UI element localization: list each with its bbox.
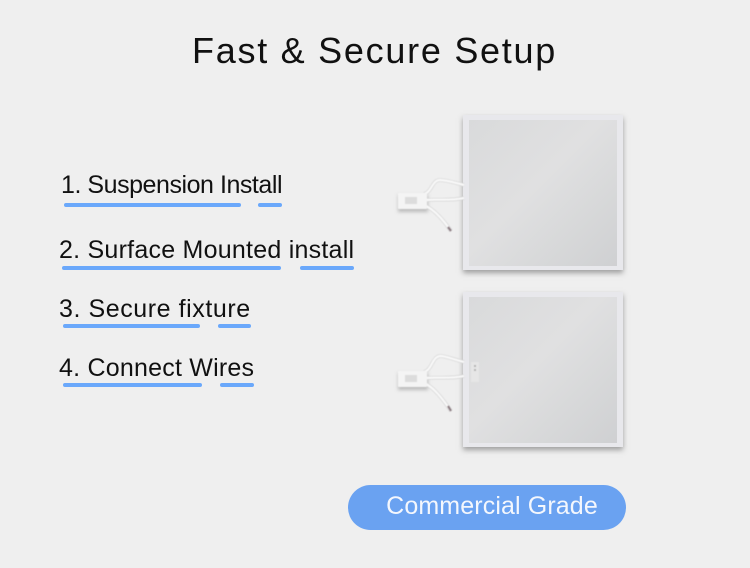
step 3 (59, 295, 251, 328)
button: Commercial Grade (348, 485, 626, 530)
step 3 underline (63, 324, 251, 328)
step 1 (61, 171, 282, 207)
step 1 underline (64, 203, 282, 207)
step 2 underline (62, 266, 354, 270)
step 2 (59, 236, 354, 270)
button: Commercial Grade: Commercial Grade (386, 492, 598, 520)
icon: driver and wires top (396, 178, 464, 232)
step 2 text: 2. Surface Mounted install (59, 236, 354, 264)
panel light top (463, 115, 623, 270)
icon: driver and wires bottom (396, 354, 478, 412)
step 1 text: 1. Suspension Install (61, 171, 282, 199)
step 4 underline (63, 383, 254, 387)
panel light bottom (463, 292, 623, 447)
step 4 (59, 354, 254, 387)
step 3 text: 3. Secure fixture (59, 295, 251, 323)
title: Fast & Secure Setup (192, 30, 557, 71)
step 4 text: 4. Connect Wires (59, 354, 254, 382)
